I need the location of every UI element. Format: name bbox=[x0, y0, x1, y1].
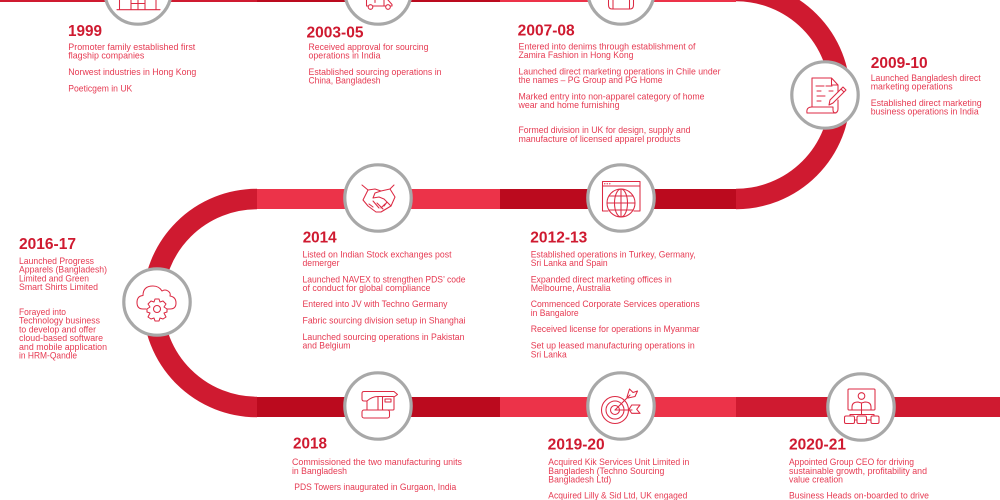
milestone: 2012-13: Set up leased manufacturing operations in bbox=[531, 341, 695, 352]
milestone: 2020-21: sustainable growth, profitability and bbox=[789, 466, 927, 477]
icon: delivery truck 2003-05 bbox=[345, 0, 411, 24]
milestone: 1999: Promoter family established first bbox=[68, 42, 196, 53]
milestone: 2007-08: wear and home furnishing bbox=[518, 100, 620, 111]
milestone: 2020-21: 2020-21 bbox=[789, 436, 846, 453]
milestone: 2016-17: and mobile application bbox=[19, 342, 107, 353]
milestone: 2014: Listed on Indian Stock exchanges post bbox=[302, 249, 452, 260]
milestone: 2003-05: operations in India bbox=[308, 51, 381, 62]
milestone: 2007-08 bbox=[518, 23, 720, 145]
milestone: 2014: Fabric sourcing division setup in Shanghai bbox=[302, 316, 466, 327]
milestone: 2012-13: Sri Lanka bbox=[531, 350, 567, 360]
milestone: 2009-10: 2009-10 bbox=[871, 55, 928, 72]
milestone: 2014: Entered into JV with Techno Germany bbox=[302, 299, 448, 310]
milestone: 2007-08: Entered into denims through establishment of bbox=[518, 42, 696, 52]
milestone: 2016-17 bbox=[19, 236, 107, 362]
milestone: 2020-21: value creation bbox=[789, 474, 843, 486]
milestone: 1999: 1999 bbox=[68, 23, 102, 40]
milestone: 1999: Norwest industries in Hong Kong bbox=[68, 67, 196, 78]
milestone: 2020-21: Appointed Group CEO for driving bbox=[789, 457, 914, 468]
icon: target with arrows 2019-20 bbox=[588, 373, 654, 439]
milestone: 2016-17: Technology business bbox=[19, 316, 100, 327]
milestone: 2016-17: Smart Shirts Limited bbox=[19, 282, 98, 293]
milestone: 2003-05 bbox=[306, 24, 442, 87]
milestone: 2007-08: Zamira Fashion in Hong Kong bbox=[518, 50, 634, 61]
milestone: 2016-17: Limited and Green bbox=[19, 273, 89, 284]
milestone: 2016-17: 2016-17 bbox=[19, 236, 76, 253]
milestone: 2016-17: Launched Progress bbox=[19, 256, 94, 267]
icon: cloud with gear 2016-17 bbox=[124, 269, 190, 335]
milestone: 2019-20: Acquired Kik Services Unit Limited in bbox=[548, 457, 689, 468]
milestone: 2009-10 bbox=[871, 55, 982, 118]
milestone: 1999: flagship companies bbox=[68, 51, 145, 62]
milestone: 2009-10: marketing operations bbox=[871, 82, 953, 93]
milestone: 2009-10: Launched Bangladesh direct bbox=[871, 73, 981, 84]
milestone: 2018: 2018 bbox=[293, 435, 327, 452]
milestone: 2016-17: cloud-based software bbox=[19, 333, 103, 344]
milestone: 2012-13: 2012-13 bbox=[530, 229, 588, 246]
icon: handshake 2014 bbox=[345, 165, 411, 231]
milestone: 2009-10: Established direct marketing bbox=[871, 98, 982, 109]
milestone: 2007-08: 2007-08 bbox=[518, 23, 575, 40]
milestone: 2012-13: in Bangalore bbox=[531, 308, 579, 319]
icon: globe browser window 2012-13 bbox=[588, 165, 654, 231]
milestone: 2012-13: Received license for operations in Myanmar bbox=[531, 324, 700, 335]
milestone: 2014 bbox=[302, 229, 466, 352]
milestone: 2003-05: 2003-05 bbox=[306, 24, 364, 41]
icon: presenter and org chart 2020-21 bbox=[828, 374, 894, 440]
milestone: 2019-20: Bangladesh Ltd) bbox=[548, 474, 611, 486]
milestone: 2014: of conduct for global compliance bbox=[302, 283, 430, 294]
milestone: 2018 bbox=[292, 435, 462, 493]
milestone: 2016-17: Apparels (Bangladesh) bbox=[19, 265, 107, 276]
milestone: 2007-08: Formed division in UK for design, supply and bbox=[518, 125, 690, 136]
milestone: 1999: Poeticgem in UK bbox=[68, 83, 133, 94]
milestone: 2014: Launched NAVEX to strengthen PDS’ code bbox=[302, 274, 466, 285]
icon: document and pen 2009-10 bbox=[792, 62, 858, 128]
milestone: 2012-13: Established operations in Turkey, Germany, bbox=[531, 249, 696, 260]
milestone: 2012-13: Expanded direct marketing offices in bbox=[531, 274, 672, 285]
milestone: 2019-20: 2019-20 bbox=[548, 436, 605, 453]
milestone: 2016-17: to develop and offer bbox=[19, 324, 96, 335]
icon: sewing machine 2018 bbox=[345, 373, 411, 439]
milestone: 2012-13: Commenced Corporate Services operations bbox=[531, 299, 700, 310]
milestone: 2014: 2014 bbox=[303, 229, 337, 246]
milestone: 2020-21 bbox=[789, 436, 929, 500]
milestone: 1999 bbox=[68, 23, 196, 94]
milestone: 2009-10: business operations in India bbox=[871, 107, 979, 118]
milestone: 2014: Launched sourcing operations in Pakistan bbox=[302, 332, 464, 343]
milestone: 2016-17: in HRM-Qandle bbox=[19, 350, 77, 362]
milestone: 2019-20: Bangladesh (Techno Sourcing bbox=[548, 466, 664, 477]
milestone: 2012-13: Sri Lanka and Spain bbox=[531, 258, 608, 269]
milestone: 2003-05: Established sourcing operations in bbox=[308, 67, 442, 78]
milestone: 2016-17: Forayed into bbox=[19, 307, 66, 318]
milestone: 2007-08: Marked entry into non-apparel category of home bbox=[518, 92, 704, 102]
milestone: 2007-08: manufacture of licensed apparel products bbox=[518, 134, 681, 145]
icon: warehouse 1999 bbox=[105, 0, 171, 24]
milestone: 2014: demerger bbox=[302, 258, 340, 269]
milestone: 2012-13 bbox=[530, 229, 700, 360]
milestone: 2003-05: China, Bangladesh bbox=[308, 76, 380, 87]
milestone: 2012-13: Melbourne, Australia bbox=[531, 283, 611, 294]
milestone: 2014: and Belgium bbox=[302, 341, 351, 352]
milestone: 2019-20 bbox=[548, 436, 689, 500]
milestone: 2018: in Bangladesh bbox=[292, 466, 347, 477]
milestone: 2018: Commissioned the two manufacturing units bbox=[292, 457, 462, 468]
milestone: 2003-05: Received approval for sourcing bbox=[308, 42, 428, 53]
milestone: 2007-08: Launched direct marketing operations in Chile under bbox=[518, 66, 720, 78]
milestone: 2007-08: the names – PG Group and PG Home bbox=[518, 75, 662, 86]
milestone: 2018: PDS Towers inaugurated in Gurgaon, India bbox=[294, 482, 457, 493]
icon: garment 2007-08 bbox=[588, 0, 654, 24]
